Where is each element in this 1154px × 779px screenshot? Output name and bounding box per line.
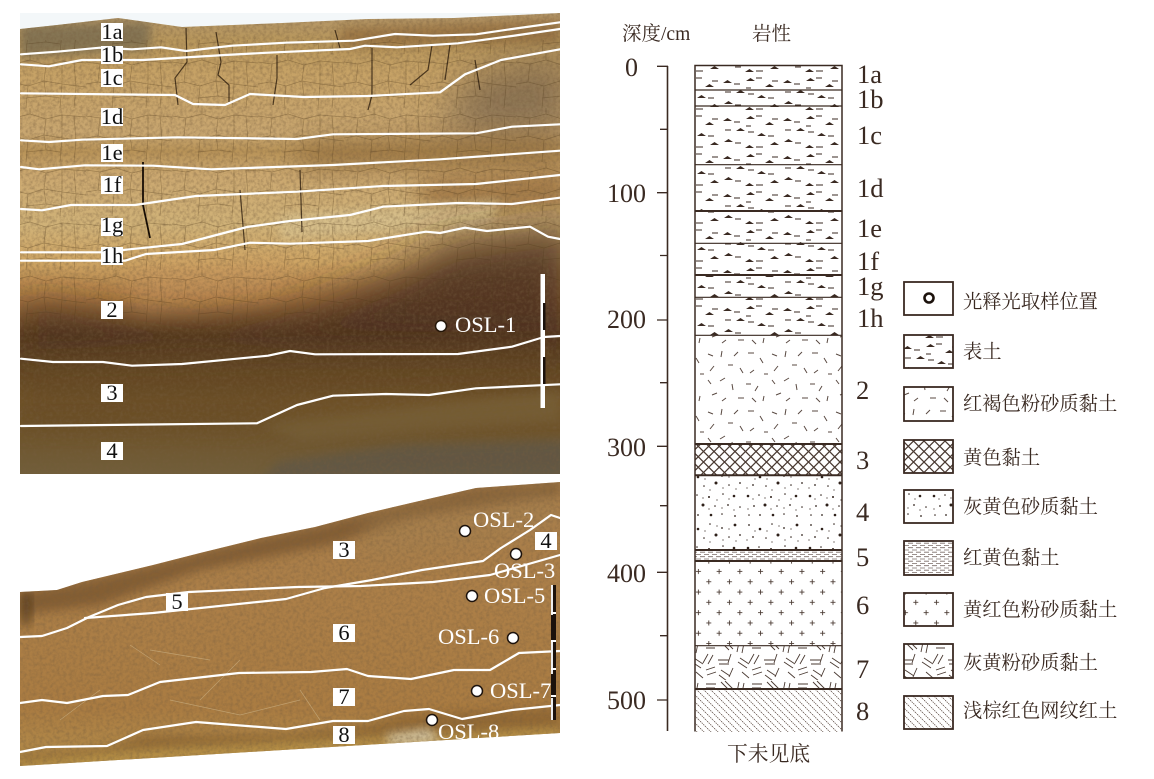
layer label: 3 <box>333 537 355 562</box>
layer label: 2: 2 <box>106 297 118 322</box>
layer names beside column <box>856 59 884 726</box>
layer label: 1f: 1f <box>103 172 122 197</box>
layer label: 3: 3 <box>106 380 118 405</box>
legend item: reddish-yellow clay: 红黄色黏土 <box>963 547 1059 569</box>
scale bar: lower section <box>551 585 556 720</box>
depth tick labels: 100 <box>607 179 646 208</box>
layer label: 1a: 1a <box>101 19 123 44</box>
layer label: 4 <box>101 438 123 463</box>
layer names beside column: 8 <box>856 696 869 726</box>
layer label: 1g: 1g <box>101 212 123 237</box>
layer label: 3 <box>101 380 123 405</box>
legend item: reddish-yellow clay <box>904 541 1059 575</box>
legend item: yellow clay <box>904 440 1040 473</box>
legend item: OSL sampling position: 光释光取样位置 <box>963 291 1098 313</box>
layer label: 5 <box>166 589 188 614</box>
depth axis <box>607 53 668 731</box>
layer names beside column: 1c <box>857 120 882 150</box>
legend item: light brown-red reticulate laterite: 浅棕红色网纹红土 <box>963 700 1117 722</box>
legend item: yellow clay: 黄色黏土 <box>963 447 1040 469</box>
layer label: 4: 4 <box>540 528 552 553</box>
depth tick labels: 0 <box>625 53 638 82</box>
sample marker: OSL-2: OSL-2 <box>473 507 534 532</box>
sample marker: OSL-5: OSL-5 <box>484 583 545 608</box>
legend <box>904 282 1117 729</box>
sample marker: OSL-8: OSL-8 <box>438 719 499 744</box>
depth tick labels: 400 <box>607 559 646 588</box>
note: bottom not seen: 下未见底 <box>727 743 810 766</box>
sample marker: OSL-2 <box>460 507 534 536</box>
layer label: 2 <box>101 297 123 322</box>
layer label: 1c: 1c <box>101 65 123 90</box>
layer names beside column: 3 <box>856 445 869 475</box>
layer label: 1h: 1h <box>101 243 123 268</box>
legend item: yellow-red silty clay: 黄红色粉砂质黏土 <box>963 599 1117 621</box>
photo: lower stratigraphic section <box>20 480 561 770</box>
photo: upper stratigraphic section <box>20 10 575 480</box>
layer names beside column: 5 <box>856 542 869 572</box>
sample marker: OSL-3: OSL-3 <box>494 558 555 583</box>
legend item: grey-yellow silty clay <box>904 644 1098 678</box>
layer names beside column: 7 <box>856 654 869 684</box>
layer names beside column: 1e <box>857 213 882 243</box>
legend item: reddish-brown silty clay <box>904 387 1117 421</box>
layer names beside column: 1f <box>857 246 879 276</box>
layer label: 5: 5 <box>171 589 183 614</box>
layer label: 1e: 1e <box>101 140 123 165</box>
layer label: 6: 6 <box>338 620 350 645</box>
scale bar: upper section <box>540 274 546 408</box>
sky strip <box>20 13 560 33</box>
lithology column <box>695 66 842 732</box>
layer names beside column: 1d <box>857 173 884 203</box>
layer label: 8: 8 <box>338 722 350 747</box>
sample marker: OSL-7: OSL-7 <box>490 678 551 703</box>
layer label: 4: 4 <box>106 438 118 463</box>
legend item: OSL sampling position <box>904 282 1098 315</box>
heading: lithology: 岩性 <box>752 23 792 45</box>
layer names beside column: 6 <box>856 590 869 620</box>
legend item: topsoil: 表土 <box>963 341 1002 363</box>
layer label: 3: 3 <box>338 537 350 562</box>
layer names beside column: 1h <box>857 303 884 333</box>
legend item: yellow-red silty clay <box>904 593 1117 626</box>
depth tick labels: 300 <box>607 433 646 462</box>
layer names beside column: 1b <box>857 84 884 114</box>
layer names beside column: 1g <box>857 271 884 301</box>
layer names beside column: 2 <box>856 375 869 405</box>
depth tick labels: 500 <box>607 686 646 715</box>
legend item: grey-yellow sandy clay <box>904 490 1098 523</box>
layer label: 1d: 1d <box>101 104 123 129</box>
layer label: 6 <box>333 620 355 645</box>
sample marker: OSL-1: OSL-1 <box>455 312 516 337</box>
layer label: 7: 7 <box>338 684 350 709</box>
sample marker: OSL-6: OSL-6 <box>438 624 499 649</box>
heading: depth: 深度/cm <box>622 23 690 45</box>
legend item: topsoil <box>904 335 1002 368</box>
layer boundaries: upper section <box>21 22 560 426</box>
legend item: grey-yellow sandy clay: 灰黄色砂质黏土 <box>963 496 1098 518</box>
legend item: reddish-brown silty clay: 红褐色粉砂质黏土 <box>963 393 1117 415</box>
layer names beside column: 4 <box>856 497 869 527</box>
legend item: grey-yellow silty clay: 灰黄粉砂质黏土 <box>963 652 1098 674</box>
layer boundaries: lower section <box>20 515 560 752</box>
layer label: 8 <box>333 722 355 747</box>
depth tick labels <box>607 53 646 715</box>
layer label: 7 <box>333 684 355 709</box>
legend item: light brown-red reticulate laterite <box>904 696 1117 729</box>
layer label: 1b: 1b <box>101 42 123 67</box>
layer label: 4 <box>535 528 557 553</box>
layer names beside column: 1a <box>857 59 882 89</box>
depth tick labels: 200 <box>607 305 646 334</box>
